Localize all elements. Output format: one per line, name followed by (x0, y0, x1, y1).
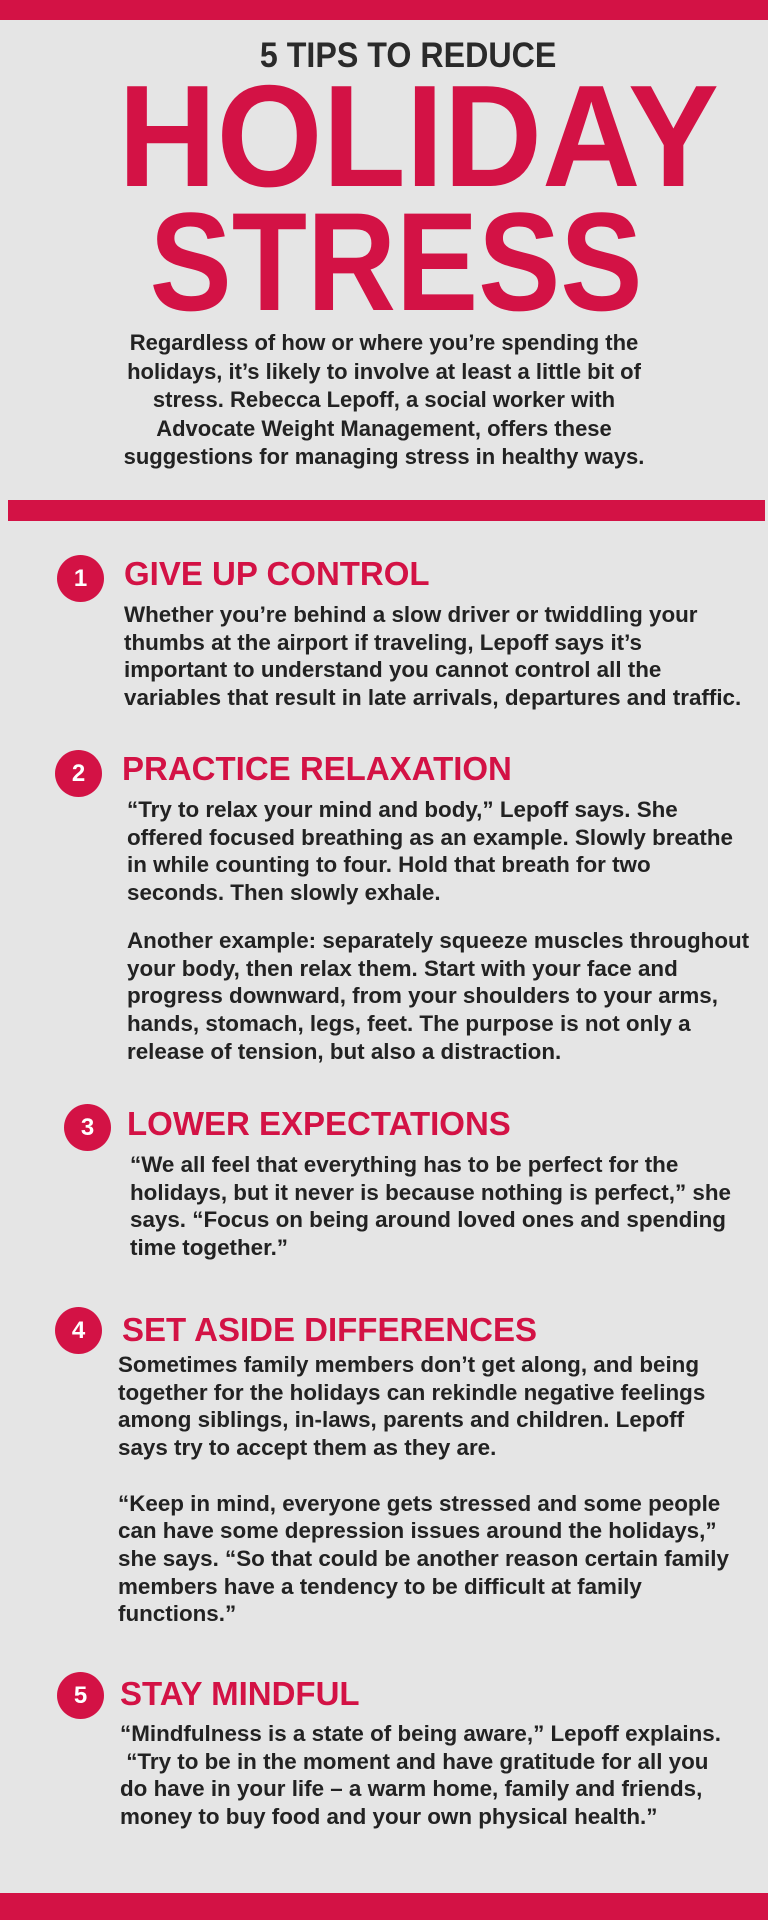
number 2 (55, 750, 102, 797)
heading 4: SET ASIDE DIFFERENCES (122, 1311, 537, 1348)
tip 5 (57, 1672, 721, 1829)
body 5: do have in your life – a warm home, family and friends, (120, 1776, 702, 1801)
tip 2 (55, 750, 749, 1064)
heading 2: PRACTICE RELAXATION (122, 750, 512, 787)
body 1 (124, 602, 741, 710)
number 5: 5 (74, 1682, 87, 1709)
body 2: in while counting to four. Hold that breath for two (127, 852, 651, 877)
body 4: says try to accept them as they are. (118, 1435, 496, 1460)
number 4 (55, 1307, 102, 1354)
body 1: Whether you’re behind a slow driver or twiddling your (124, 602, 698, 627)
body 4: members have a tendency to be difficult at family (118, 1574, 642, 1599)
intro paragraph: Advocate Weight Management, offers these (156, 416, 612, 441)
number 2: 2 (72, 760, 85, 787)
body 3: says. “Focus on being around loved ones and spending (130, 1207, 726, 1232)
tip 1 (57, 555, 741, 710)
body 2: your body, then relax them. Start with your face and (127, 956, 678, 981)
body 4 (118, 1352, 729, 1626)
title: HOLIDAY (118, 55, 719, 217)
body 2: release of tension, but also a distraction. (127, 1039, 561, 1064)
body 2: “Try to relax your mind and body,” Lepoff says. She (127, 797, 678, 822)
body 4: Sometimes family members don’t get along, and being (118, 1352, 699, 1377)
body 5: “Mindfulness is a state of being aware,” Lepoff explains. (120, 1721, 721, 1746)
title (118, 55, 719, 340)
subtitle: 5 TIPS TO REDUCE (260, 36, 556, 75)
body 4: functions.” (118, 1601, 236, 1626)
body 4: “Keep in mind, everyone gets stressed and some people (118, 1491, 720, 1516)
body 4: together for the holidays can rekindle negative feelings (118, 1380, 705, 1405)
body 2: Another example: separately squeeze muscles throughout (127, 928, 749, 953)
number 3: 3 (81, 1114, 94, 1141)
body 2: seconds. Then slowly exhale. (127, 880, 441, 905)
body 5 (120, 1721, 721, 1829)
body 1: variables that result in late arrivals, departures and traffic. (124, 685, 741, 710)
body 3: holidays, but it never is because nothing is perfect,” she (130, 1180, 731, 1205)
body 3: time together.” (130, 1235, 288, 1260)
top bar (0, 0, 768, 20)
intro paragraph: suggestions for managing stress in healthy ways. (124, 444, 644, 469)
tip 4 (55, 1307, 729, 1626)
body 3 (130, 1152, 731, 1260)
body 1: thumbs at the airport if traveling, Lepoff says it’s (124, 630, 642, 655)
number 3 (64, 1104, 111, 1151)
body 2: hands, stomach, legs, feet. The purpose is not only a (127, 1011, 691, 1036)
body 5: money to buy food and your own physical health.” (120, 1804, 657, 1829)
body 4: among siblings, in-laws, parents and children. Lepoff (118, 1407, 684, 1432)
number 1 (57, 555, 104, 602)
number 1: 1 (74, 565, 87, 592)
body 2: offered focused breathing as an example. Slowly breathe (127, 825, 733, 850)
body 1: important to understand you cannot control all the (124, 657, 661, 682)
tip 3 (64, 1104, 731, 1260)
body 4: can have some depression issues around the holidays,” (118, 1518, 717, 1543)
title: STRESS (150, 183, 642, 340)
bottom bar (0, 1893, 768, 1920)
number 4: 4 (72, 1317, 85, 1344)
body 3: “We all feel that everything has to be perfect for the (130, 1152, 678, 1177)
body 5: “Try to be in the moment and have gratitude for all you (126, 1749, 708, 1774)
heading 5: STAY MINDFUL (120, 1675, 360, 1712)
intro paragraph (124, 330, 644, 469)
intro paragraph: holidays, it’s likely to involve at least a little bit of (127, 359, 641, 384)
intro paragraph: stress. Rebecca Lepoff, a social worker with (153, 387, 615, 412)
intro paragraph: Regardless of how or where you’re spending the (130, 330, 638, 355)
heading 3: LOWER EXPECTATIONS (127, 1105, 511, 1142)
body 4: she says. “So that could be another reason certain family (118, 1546, 729, 1571)
number 5 (57, 1672, 104, 1719)
body 2: progress downward, from your shoulders to your arms, (127, 983, 718, 1008)
divider bar (8, 500, 765, 521)
body 2 (127, 797, 749, 1064)
heading 1: GIVE UP CONTROL (124, 555, 430, 592)
